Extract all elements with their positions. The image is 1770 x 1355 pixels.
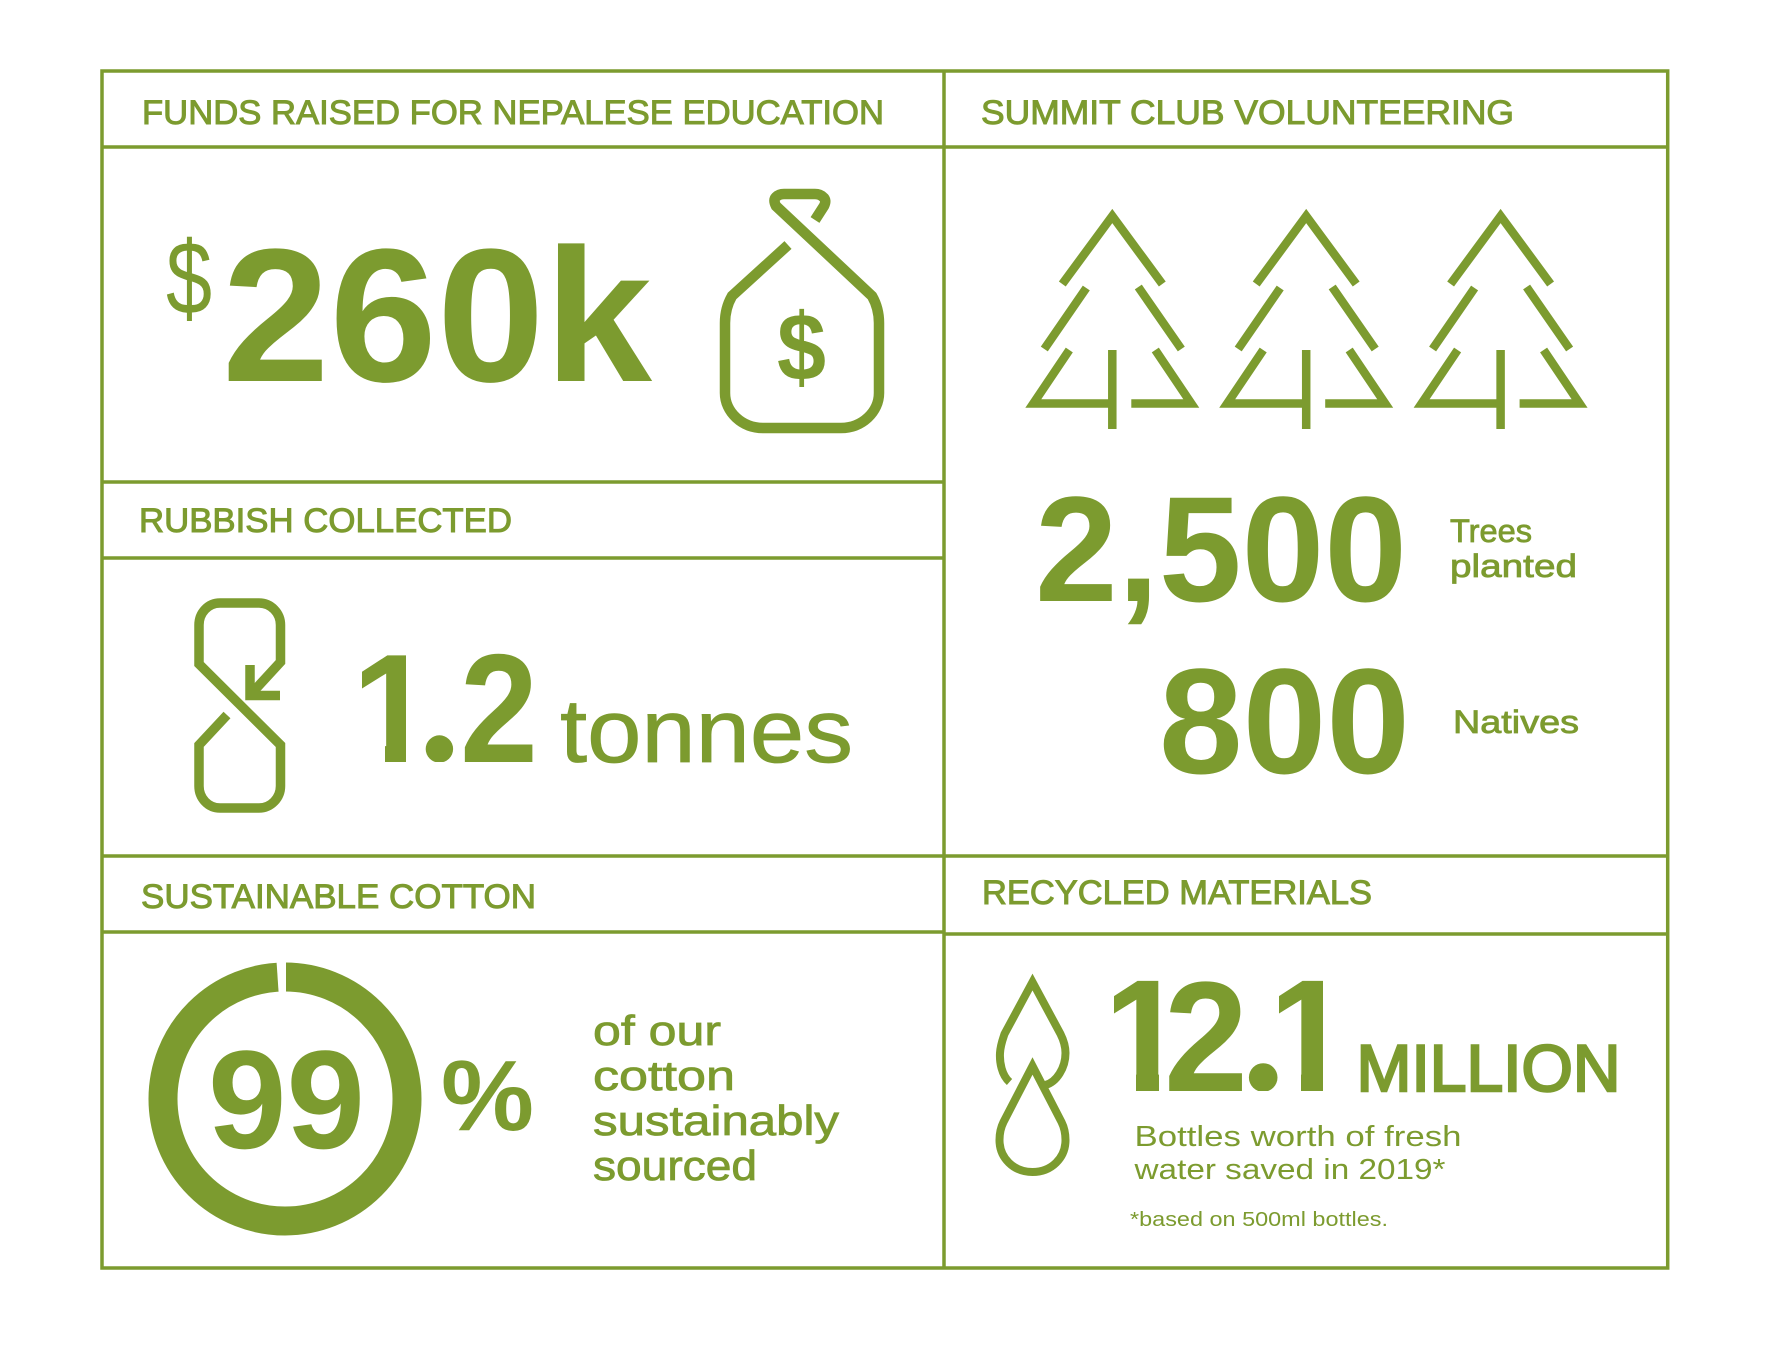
text: of our cotton sustainably sourced: sourced xyxy=(593,1142,757,1189)
icon: recycling loop xyxy=(199,603,280,808)
stat: 12.1: 2 xyxy=(1164,950,1248,1125)
heading: sustainable cotton: SUSTAINABLE COTTON xyxy=(141,878,536,916)
text: of our cotton sustainably sourced: sustainably xyxy=(593,1097,839,1144)
stat: 2,500: 2,500 xyxy=(1035,465,1407,633)
stat: 99: 99 xyxy=(208,1021,365,1178)
footnote: *based on 500ml bottles. xyxy=(1130,1209,1388,1231)
panel: rubbish collected xyxy=(139,502,853,808)
label: natives: Natives xyxy=(1453,704,1579,740)
stat: 12.1: 1 xyxy=(1264,946,1353,1125)
panel: summit club volunteering xyxy=(981,94,1580,805)
icon: money bag xyxy=(725,194,879,428)
heading: summit club volunteering: SUMMIT CLUB VOLUNTEERING xyxy=(981,94,1514,132)
stat: 1.2: 1 xyxy=(350,622,436,795)
heading: funds raised: FUNDS RAISED FOR NEPALESE EDUCATION xyxy=(142,94,884,132)
stat: 1.2 xyxy=(362,654,532,762)
icon: money bag: $ xyxy=(777,294,826,401)
stat: 12.1: 1 xyxy=(1099,946,1188,1125)
heading: rubbish collected: RUBBISH COLLECTED xyxy=(139,502,512,540)
label: trees planted: planted xyxy=(1450,548,1577,584)
label: trees planted xyxy=(1450,513,1577,584)
text: bottles worth of fresh water saved: Bottles worth of fresh xyxy=(1134,1121,1462,1153)
small dollar sign: $ xyxy=(166,221,212,337)
icon: tree 2 xyxy=(1227,216,1385,429)
stat: 1.2: 2 xyxy=(460,622,538,795)
text: of our cotton sustainably sourced xyxy=(593,1007,839,1189)
icon: tree 3 xyxy=(1422,216,1580,429)
panel: sustainable cotton xyxy=(141,878,839,1221)
stat: 1.2: . xyxy=(410,572,468,807)
stat: 260k: 260k xyxy=(222,210,652,422)
text: bottles worth of fresh water saved: water saved in 2019* xyxy=(1133,1154,1446,1186)
text: of our cotton sustainably sourced: of our xyxy=(593,1007,721,1054)
label: trees planted: Trees xyxy=(1450,513,1532,549)
unit: million: MILLION xyxy=(1356,1031,1620,1105)
icon: water drops xyxy=(1000,982,1066,1172)
unit: tonnes: tonnes xyxy=(560,682,853,782)
stat: 12.1 xyxy=(1114,980,1323,1091)
panel: funds raised xyxy=(142,94,884,428)
heading: recycled materials: RECYCLED MATERIALS xyxy=(982,874,1372,912)
stat: 800: 800 xyxy=(1159,637,1410,805)
percent sign: % xyxy=(441,1040,534,1152)
icon: tree 1 xyxy=(1033,216,1191,429)
text: bottles worth of fresh water saved xyxy=(1133,1121,1462,1186)
panel: recycled materials xyxy=(982,874,1620,1231)
chart: 99 percent donut xyxy=(163,958,407,1221)
text: of our cotton sustainably sourced: cotton xyxy=(593,1052,735,1099)
stat: 12.1: . xyxy=(1233,892,1294,1138)
